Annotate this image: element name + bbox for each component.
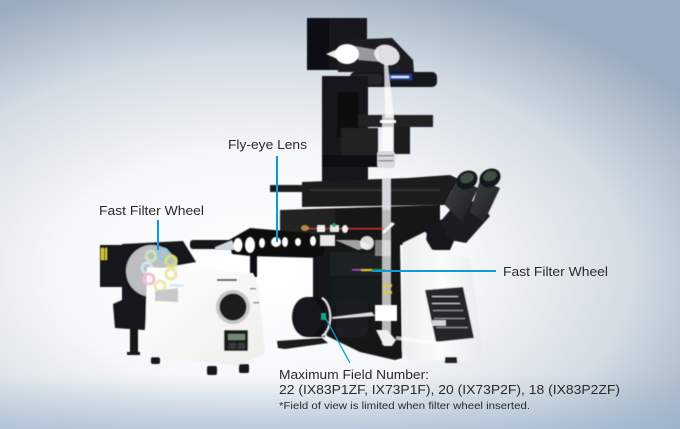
feet (151, 357, 160, 364)
lower foot (445, 357, 457, 363)
label: fast filter wheel right: Fast Filter Wheel (503, 264, 608, 279)
callout line: maximum field number (325, 317, 350, 363)
icon: microscope body (190, 18, 504, 363)
lower optics (375, 305, 397, 321)
binocular base (426, 218, 458, 250)
display (224, 330, 248, 351)
text block: maximum field number: 22 (IX83P1ZF, IX73P1F), 20 (IX73P2F), 18 (IX83P2ZF) (279, 382, 620, 397)
filter wheel (126, 245, 178, 297)
camera (307, 297, 325, 337)
text block: maximum field number (279, 367, 620, 412)
text block: maximum field number: Maximum Field Number: (279, 367, 429, 382)
blue logo (388, 74, 412, 80)
horizontal illumination (215, 240, 236, 250)
label: fast filter wheel left: Fast Filter Wheel (99, 203, 204, 218)
side tube (229, 228, 325, 258)
lamp housing upper box (307, 18, 367, 70)
icon: light path (215, 41, 446, 346)
icon: light source box with filter wheel (100, 241, 265, 375)
condenser (358, 115, 433, 127)
filter band (352, 269, 362, 271)
callout line: fly-eye lens (276, 156, 278, 242)
stage (270, 185, 310, 192)
white lamp box (145, 267, 265, 366)
knob (216, 290, 250, 324)
eyepiece tubes (445, 178, 478, 222)
white body (402, 232, 483, 360)
red laser (308, 228, 384, 229)
black housing (100, 245, 124, 287)
text block: maximum field number: *Field of view is limited when filter wheel inserted. (279, 400, 530, 412)
front label plate (425, 287, 474, 342)
label: fly-eye lens: Fly-eye Lens (228, 137, 308, 152)
callout line: fast filter wheel right (372, 270, 496, 272)
vent (155, 288, 178, 302)
main frame (280, 205, 440, 360)
callout line: fast filter wheel left (157, 220, 159, 250)
